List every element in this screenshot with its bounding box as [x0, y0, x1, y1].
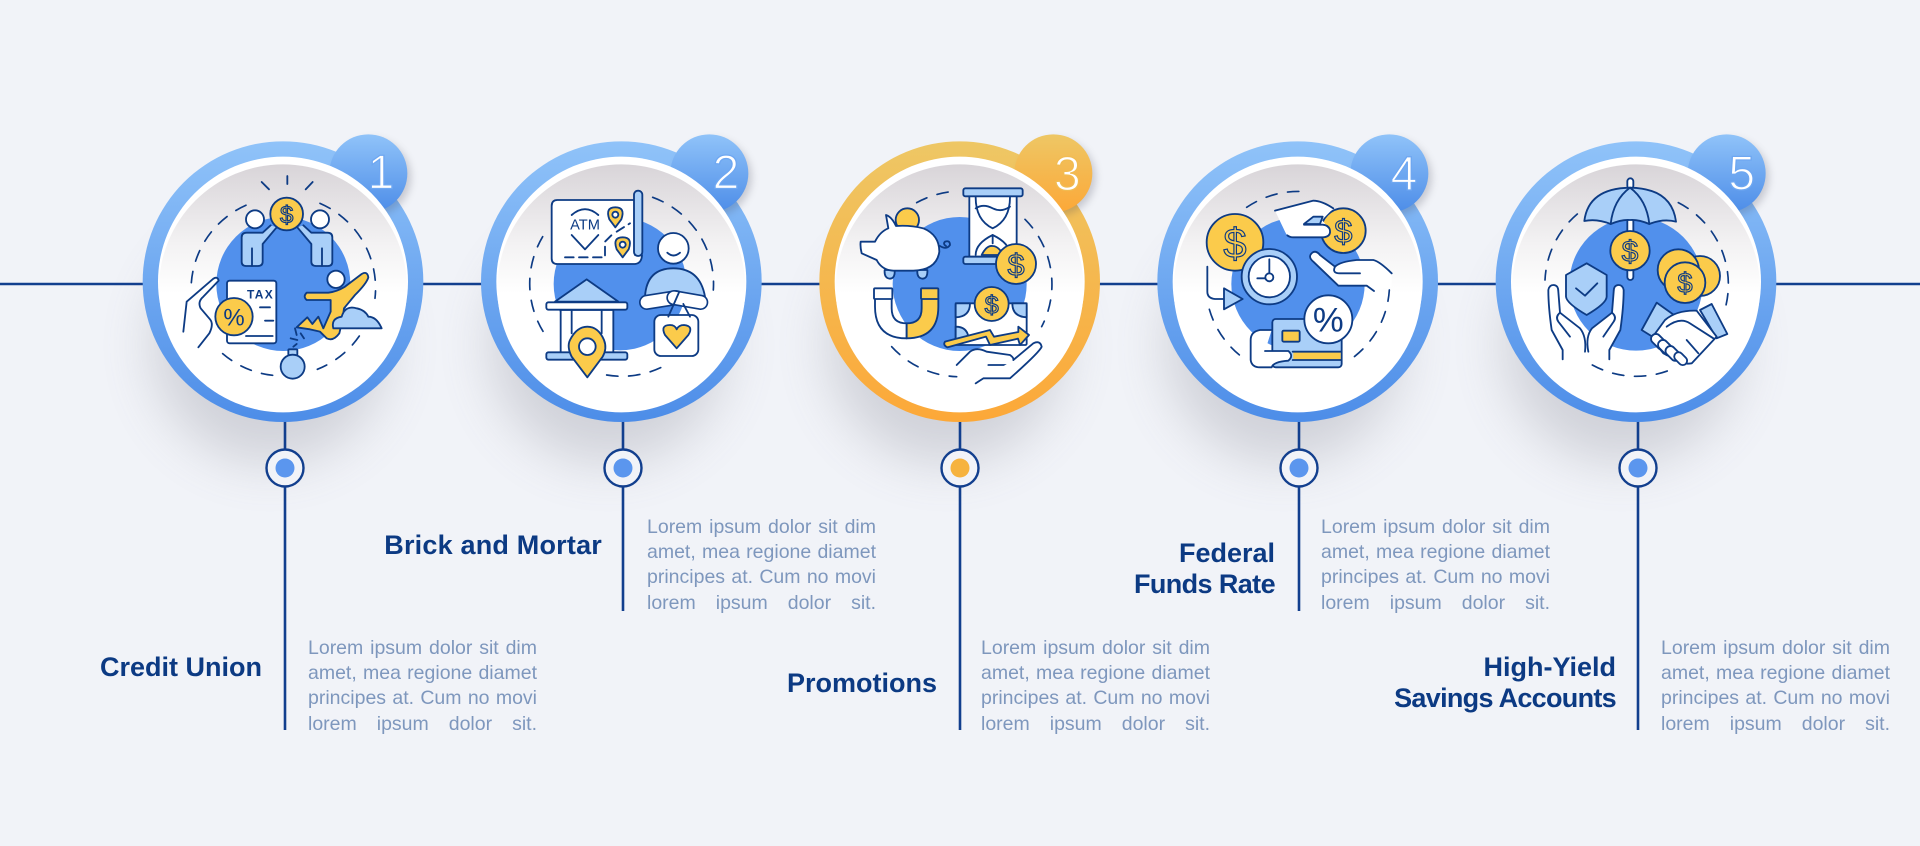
- heading: Credit Union: Credit Union: [100, 652, 262, 682]
- icon: promotions: [860, 188, 1052, 383]
- icon: credit union: TAX: [247, 288, 274, 302]
- vertical connector 1 with node: [266, 420, 304, 730]
- heading: Federal Funds Rate: [1134, 538, 1275, 599]
- text block 5: Lorem ipsum dolor sit dim: [1661, 636, 1890, 658]
- panel: step 3 circle: [819, 134, 1100, 422]
- panel: step 1 circle: [143, 134, 423, 422]
- icon: credit union: [183, 176, 382, 379]
- badge 4: [1350, 134, 1432, 216]
- badge 5: 5: [1728, 147, 1755, 200]
- badge 3: [1014, 134, 1096, 216]
- badge 2: [670, 134, 752, 216]
- panel: step 4 circle: [1157, 134, 1438, 422]
- panel: step 2 circle: [481, 134, 762, 422]
- vertical connector 2 with node: [604, 420, 642, 611]
- icon: promotions: $: [985, 291, 999, 319]
- icon: credit union: %: [223, 304, 245, 331]
- heading: High-Yield Savings Accounts: High-Yield: [1484, 652, 1616, 682]
- text block 4: Lorem ipsum dolor sit dim: [1321, 516, 1550, 538]
- heading: High-Yield Savings Accounts: Savings Accounts: [1394, 683, 1616, 713]
- heading: High-Yield Savings Accounts: [1394, 652, 1616, 713]
- icon: high-yield savings accounts: $: [1677, 268, 1693, 299]
- text block 3: Lorem ipsum dolor sit dim: [981, 636, 1210, 658]
- text block 5: principes at. Cum no movi: [1661, 687, 1890, 709]
- text block 4: lorem ipsum dolor sit.: [1321, 592, 1550, 614]
- text block 2: Lorem ipsum dolor sit dim: [647, 516, 876, 538]
- horizontal timeline: [0, 283, 1920, 285]
- badge 2: 2: [713, 146, 739, 199]
- badge 1: [329, 134, 411, 216]
- text block 2: lorem ipsum dolor sit.: [647, 592, 876, 614]
- text block 5: [1661, 636, 1890, 735]
- text block 3: principes at. Cum no movi: [981, 687, 1210, 709]
- icon: brick and mortar: ATM: [570, 217, 600, 233]
- icon: federal funds rate: $: [1223, 220, 1247, 267]
- text block 5: lorem ipsum dolor sit.: [1661, 713, 1890, 735]
- text block 5: amet, mea regione diamet: [1661, 662, 1890, 684]
- badge 5: [1688, 134, 1769, 216]
- text block 1: amet, mea regione diamet: [308, 662, 537, 684]
- heading: Brick and Mortar: Brick and Mortar: [384, 530, 602, 560]
- icon: high-yield savings accounts: $: [1622, 236, 1639, 269]
- badge 3: 3: [1054, 148, 1081, 201]
- icon: federal funds rate: %: [1313, 302, 1344, 340]
- icon: credit union: $: [280, 202, 293, 229]
- text block 4: principes at. Cum no movi: [1321, 566, 1550, 588]
- text block 1: lorem ipsum dolor sit.: [308, 713, 537, 735]
- heading: Promotions: Promotions: [787, 668, 937, 698]
- text block 1: [308, 636, 537, 735]
- shadows under circles: [152, 227, 1740, 463]
- icon: brick and mortar: [530, 191, 714, 377]
- text block 3: lorem ipsum dolor sit.: [981, 713, 1210, 735]
- text block 1: Lorem ipsum dolor sit dim: [308, 636, 537, 658]
- vertical connector 3 with node: [942, 420, 978, 730]
- text block 3: amet, mea regione diamet: [981, 662, 1210, 684]
- vertical connector 4 with node: [1280, 420, 1318, 611]
- heading: Federal Funds Rate: Federal: [1179, 538, 1275, 568]
- text block 2: amet, mea regione diamet: [647, 541, 876, 563]
- text block 4: [1321, 516, 1550, 614]
- vertical connector 5 with node: [1620, 420, 1656, 730]
- icon: promotions: $: [1007, 248, 1025, 282]
- text block 3: [981, 636, 1210, 735]
- text block 2: [647, 516, 876, 614]
- badge 1: 1: [368, 146, 394, 199]
- text block 4: amet, mea regione diamet: [1321, 541, 1550, 563]
- icon: federal funds rate: [1207, 191, 1392, 367]
- text block 2: principes at. Cum no movi: [647, 566, 876, 588]
- icon: high-yield savings accounts: [1545, 178, 1728, 376]
- heading: Federal Funds Rate: Funds Rate: [1134, 569, 1275, 599]
- icon: federal funds rate: $: [1334, 213, 1352, 250]
- badge 4: 4: [1391, 148, 1417, 201]
- text block 1: principes at. Cum no movi: [308, 687, 537, 709]
- panel: step 5 circle: [1496, 134, 1776, 422]
